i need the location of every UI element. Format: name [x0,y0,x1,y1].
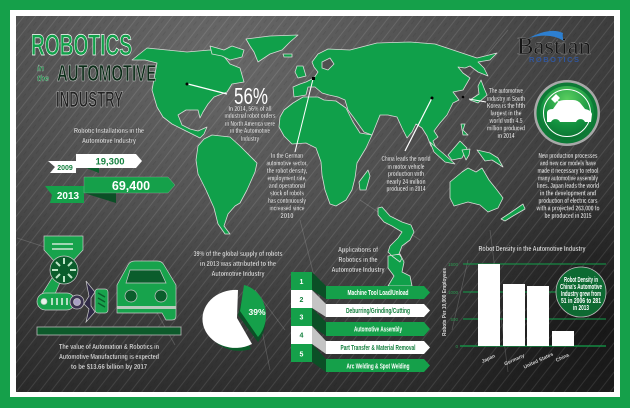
Sulawesi [462,149,470,160]
Greenland [246,35,298,62]
row 4 [291,326,430,354]
text: value of automation: to be $13.66 billion by 2017 [71,364,147,371]
callout: Germany [266,77,315,220]
callout: South Korea [462,88,525,140]
title: in [37,64,44,73]
row 3 [291,308,430,336]
callout: China robot density [556,267,606,317]
Philippines [461,124,468,135]
pie chart 39% [202,285,266,351]
callout: 56% North America: In 2014, 56% of all [228,106,272,113]
callout: China robot density: in 2013 [573,305,589,312]
callout: South Korea: Korea is the fifth [487,103,525,110]
icon: electric car button [534,80,600,146]
callout: South Korea: in 2014 [498,133,515,140]
Borneo [448,141,467,160]
callout: China [382,96,434,193]
text: 39% global supply: 39% of the global supply of robots [194,251,283,258]
New Zealand [501,204,525,221]
ribbon: 2013 69,400: 69,400 [112,179,150,193]
row 3: 3 [300,314,304,322]
callout: South Korea: world with 4.5 [489,118,523,125]
callout: China: China leads the world [382,156,430,163]
callout: 56% North America: Industry [241,136,259,143]
text: 39% global supply: Automotive Industry [212,271,265,278]
text: new production processes: with a projected 263,000 to [536,206,600,212]
callout: China: nearly 24 million [386,179,426,186]
title: INDUSTRY [56,87,123,112]
text: applications heading: Applications of [338,247,379,254]
base platform [37,327,181,335]
Japan [470,80,487,103]
Madagascar [359,170,370,190]
text: new production processes: made it necessary to retool [538,168,599,175]
ribbon: 2013 69,400 [45,177,175,203]
callout: China robot density: 51 in 2006 to 281 [561,298,601,305]
callout: Germany: the robot density, [267,168,307,175]
row 5: Arc Welding & Spot Welding [346,364,410,370]
icon: car front [117,261,176,320]
Australia [450,168,503,212]
bar chart: robot density: 500 [450,317,458,322]
South America [196,135,257,234]
callout: 56% North America: in the Automotive [230,128,270,135]
Sumatra [430,142,455,164]
callout: China robot density: Robot Density in [564,277,598,284]
Africa [279,97,372,206]
bar chart: robot density: Germany [503,353,526,367]
callout: Germany: has continuously [268,198,306,205]
callout: 56% North America: industrial robot orders [224,113,276,120]
text: value of automation [59,344,159,371]
text: new production processes: in the development and [540,190,596,198]
text: new production processes: be produced in 2015 [544,213,592,220]
text: new production processes: and new car models have [540,160,596,168]
ribbon: 2009 19,300: 19,300 [95,156,125,168]
text: new production processes: many automotive assembly [538,176,598,182]
row 1 [291,272,430,299]
callout: South Korea: The automotive [489,88,523,95]
callout: South Korea: industry in South [487,96,525,103]
callout: Germany: In the German [271,153,303,160]
text: 39% global supply: in 2013 was attributed to the [200,261,276,268]
callout: China: production with [388,171,424,178]
bar chart: robot density: 1500 [448,262,458,267]
callout: 56% North America: in North America were [225,121,275,128]
North America [132,48,244,138]
text: value of automation: The value of Automation & Robotics in [59,344,159,351]
logo: Bastian Robotics: ROBOTICS [529,55,579,64]
callout: Germany: stock of robots [270,190,304,198]
bar chart: robot density [442,246,606,371]
bar chart: robot density: 0 [455,344,458,349]
callout: China: in motor vehicle [388,164,425,171]
world map [132,35,525,234]
callout: China: produced in 2014 [386,186,426,193]
row 4: 4 [300,332,304,340]
callout: 56% North America [186,82,276,143]
callout: Germany: and operational [269,183,305,190]
bar chart: robot density: 1000 [448,290,458,295]
callout: Germany: automotive sector, [266,160,308,168]
ribbon: 2009 19,300: 2009 [57,165,73,172]
British Isles [295,66,306,78]
row 1: Machine Tool Load/Unload [348,290,408,297]
logo: Bastian Robotics: Bastian [517,34,591,60]
Canadian Arctic islands [210,46,244,60]
text: applications heading: Robotics in the [338,257,378,264]
New Guinea [477,150,503,167]
callout: 56% North America: 56% [234,83,268,109]
ribbon: 2009 19,300 [48,154,142,173]
row 2 [291,290,430,317]
Iceland [283,54,292,57]
bar chart: robot density: China [555,352,570,364]
callout: Germany: employment rate, [268,176,307,182]
ribbon: 2013 69,400: 2013 [57,191,80,202]
icon: robot arm assembling [37,236,108,322]
text: new production processes [536,153,600,220]
callout: South Korea: million produced [487,126,525,132]
text: robotic installations heading: Automotive Industry [82,138,136,145]
text: new production processes: New production processes [538,153,598,160]
text: robotic installations heading [74,128,144,145]
Scandinavia gap [322,58,334,70]
row 5 [291,344,430,372]
row 2: 2 [300,297,304,304]
bar chart: robot density: Robots Per 10,000 Employees [442,268,448,336]
title: the [37,74,50,83]
callout: China robot density: Industry grew from [561,291,601,298]
bar chart: robot density: Robot Density in the Automotive Industry [478,246,586,253]
Eurasia [293,42,497,148]
row 4: Part Transfer & Material Removal [340,345,416,352]
title [31,29,156,112]
callout: South Korea: largest in the [490,110,522,118]
text: applications heading: Automotive Industry [332,267,385,274]
text: applications heading [332,247,385,274]
text: new production processes: lines. Japan leads the world [537,183,599,190]
list: applications of robotics [291,272,430,372]
title: ROBOTICS [31,29,132,62]
row 2: Deburring/Grinding/Cutting [346,308,410,315]
title: AUTOMOTIVE [57,60,156,86]
row 3: Automotive Assembly [354,326,402,334]
row 1: 1 [300,279,304,286]
callout: Germany: increased since [270,206,305,212]
text: robotic installations heading: Robotic Installations in the [74,128,144,135]
pie chart 39%: 39% [248,307,266,317]
text: value of automation: Automotive Manufacturing is expected [59,354,159,361]
green landmass above list [378,207,414,286]
callout: Germany: 2010 [280,213,294,220]
bar chart: robot density: United States [523,352,555,371]
callout: China robot density: China's Automotive [560,284,602,291]
row 5: 5 [300,352,304,358]
text: 39% global supply [194,251,283,278]
text: new production processes: production of electric cars [538,198,598,205]
bar chart: robot density: Japan [481,353,496,365]
